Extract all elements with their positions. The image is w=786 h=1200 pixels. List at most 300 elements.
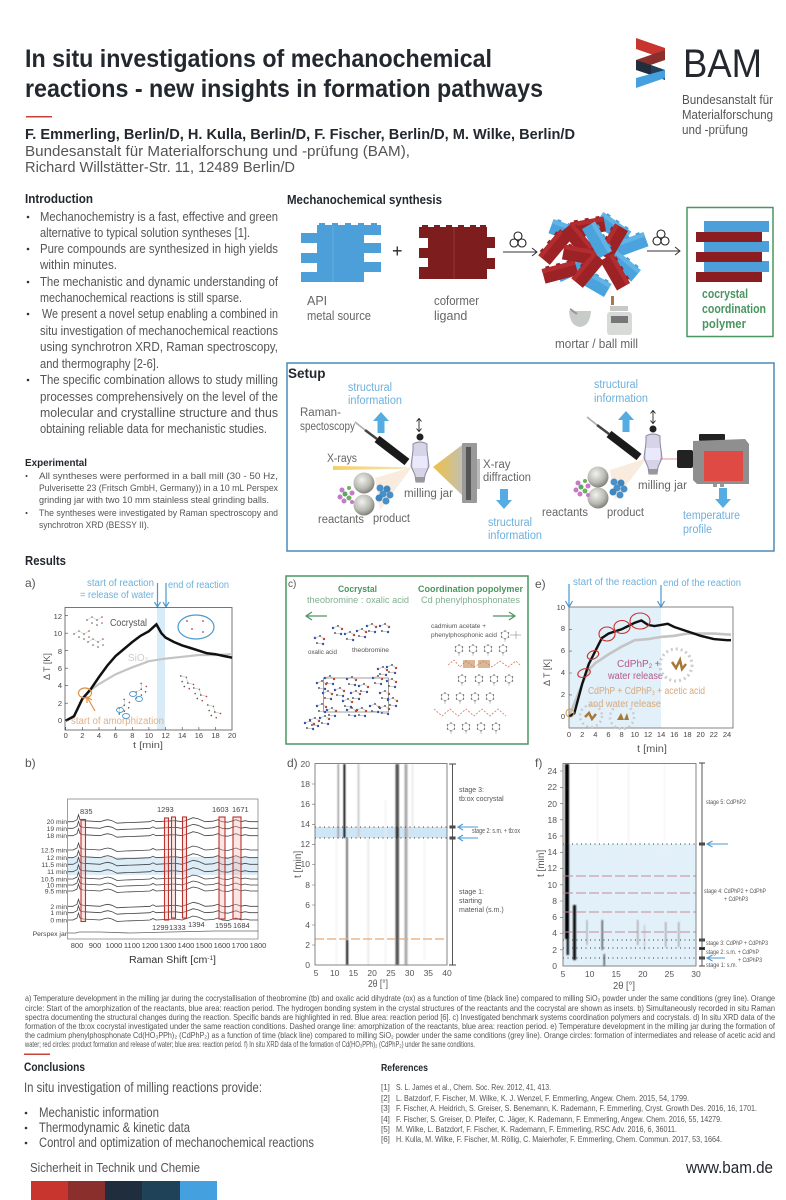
- stage labels: + CdPhP3: [738, 957, 762, 964]
- reference list: [5]: [381, 1125, 390, 1134]
- x axis: [567, 730, 731, 739]
- right setup: arrow down: [715, 488, 731, 508]
- panel letter c: c): [288, 579, 296, 590]
- conclusions bullets: Control and optimization of mechanochemical reactions: [39, 1135, 314, 1150]
- reaction arrows: [566, 584, 664, 607]
- x axis: 14: [178, 731, 186, 740]
- right setup: product: [610, 478, 628, 498]
- figure caption: water; red circles: product formation and release of water; blue area: reaction period. f) In situ XRD data of the formation of Cd(HO₃PPh)₂ (CdPhP₂) under the same conditions.: [24, 1039, 475, 1049]
- x axis: 12: [644, 730, 652, 739]
- time labels: [33, 819, 68, 938]
- orange marker: [566, 709, 574, 717]
- blue ellipse inset: [178, 615, 214, 639]
- y axis: [557, 603, 572, 721]
- reaction annotations: start of reaction: [87, 578, 154, 589]
- right setup: temperature profile: [683, 510, 740, 536]
- reference list: [3]: [381, 1104, 390, 1113]
- x axis: 6: [606, 730, 611, 739]
- introduction bullets: obtaining reliable data for mechanistic studies.: [40, 421, 267, 436]
- x axis: 8: [130, 731, 134, 740]
- plot frame: [65, 608, 232, 730]
- product box: [687, 208, 773, 336]
- reaction labels: start of the reaction: [573, 577, 657, 588]
- footer url: www.bam.de: [685, 1158, 773, 1177]
- milling symbol 2: [653, 230, 669, 245]
- x axis label: 2θ [°]: [368, 979, 388, 990]
- x axis: 10: [330, 968, 340, 978]
- band labels: 1293: [157, 805, 174, 814]
- time labels: 2 min: [50, 904, 67, 911]
- panel e: temperature chart: [535, 577, 741, 755]
- introduction bullets: The mechanistic and dynamic understanding of: [40, 274, 278, 289]
- accent line: header: [26, 116, 52, 118]
- left setup: label milling jar: milling jar: [404, 488, 453, 500]
- brick pile: [537, 211, 649, 297]
- y axis: 4: [552, 928, 557, 938]
- conclusions bullets: Thermodynamic & kinetic data: [39, 1120, 190, 1135]
- x axis: [71, 941, 266, 950]
- x axis: 1300: [160, 941, 176, 950]
- right setup: probe: [587, 417, 639, 457]
- y axis: 6: [305, 900, 310, 910]
- stage labels: tb:ox cocrystal: [459, 796, 504, 803]
- plot frame: [563, 764, 696, 966]
- left setup: structural information top: structural: [348, 382, 392, 394]
- logo institution: Bundesanstalt für: [682, 92, 774, 107]
- x axis label: 2θ [°]: [613, 981, 635, 992]
- x axis: 20: [367, 968, 377, 978]
- left setup: labels reactants product: product: [373, 513, 411, 525]
- phase transition dashes: [563, 876, 696, 932]
- logo wordmark: BAM: [683, 42, 762, 86]
- orange marker: [78, 688, 95, 711]
- panel a: temperature chart: [25, 576, 236, 750]
- stage bar: [449, 764, 456, 965]
- left setup: raman label: [300, 407, 355, 433]
- x axis label: -1: [207, 956, 214, 962]
- panel letter b: b): [25, 756, 36, 770]
- mortar icon: [569, 309, 591, 327]
- band labels: [80, 805, 250, 932]
- orange annotation: 3: [652, 691, 655, 697]
- right setup: structural information: information: [594, 393, 648, 405]
- left setup: x-ray diffraction label: diffraction: [483, 472, 531, 484]
- left setup: milling jar: [411, 434, 429, 482]
- x axis: 1400: [178, 941, 194, 950]
- heading: conclusions: Conclusions: [24, 1060, 85, 1074]
- highlighted bands: [81, 817, 241, 922]
- label: mortar / ball mill: mortar / ball mill: [555, 337, 638, 351]
- y axis: 8: [561, 624, 565, 633]
- curve labels: SiO: [128, 653, 145, 664]
- x axis: 1700: [232, 941, 248, 950]
- y axis: 10: [557, 603, 565, 612]
- heading: mechanochemical synthesis: Mechanochemical synthesis: [287, 192, 442, 207]
- stage labels: stage 3:: [459, 787, 484, 794]
- introduction bullets: The specific combination allows to study milling: [40, 372, 278, 387]
- stage bar: [699, 763, 705, 966]
- time labels: Perspex jar: [33, 931, 68, 938]
- coordination polymer heading: Coordination popolymer: [418, 584, 523, 595]
- cocrystal heading: theobromine : oxalic acid: [307, 595, 409, 606]
- reagents labels: cadmium acetate +: [431, 623, 486, 630]
- polymer structure bottom: [434, 692, 506, 734]
- reference list: [4]: [381, 1115, 390, 1124]
- x axis: 20: [228, 731, 236, 740]
- label: API metal source: API: [307, 294, 327, 308]
- reaction labels: [573, 577, 741, 589]
- y axis: 18: [548, 815, 557, 825]
- cocrystal heading: [307, 584, 409, 606]
- y axis label: Δ T [K]: [542, 659, 552, 686]
- ball mill icon: [607, 296, 632, 335]
- introduction bullets: and thermography [2-6].: [40, 356, 159, 371]
- product labels: cocrystal: [702, 287, 748, 301]
- y axis: 0: [305, 960, 310, 970]
- x axis: 10: [585, 969, 595, 979]
- introduction bullets: processes comprehensively on the level of the: [40, 389, 278, 404]
- introduction bullets: situ investigation of mechanochemical reactions: [40, 323, 278, 338]
- experimental bullets: synchrotron XRD (BESSY II).: [39, 520, 149, 531]
- right setup: labels: [542, 480, 687, 519]
- y axis: [54, 612, 68, 725]
- curve labels: [110, 618, 149, 664]
- band labels: 1684: [233, 921, 250, 930]
- conclusions bullets: Mechanistic information: [39, 1105, 159, 1120]
- product labels: coordination: [702, 302, 766, 316]
- reaction labels: end of the reaction: [663, 578, 741, 589]
- reaction area: [569, 607, 661, 728]
- reagents labels: [431, 623, 497, 639]
- cocrystal curve: [66, 624, 232, 721]
- logo institution: und -prüfung: [682, 122, 748, 137]
- label: API metal source: [307, 294, 371, 323]
- orange annotation: [588, 686, 705, 710]
- band labels: 1603: [212, 805, 229, 814]
- plot frame: [68, 799, 258, 939]
- reference list: [381, 1083, 757, 1144]
- panel: references: [381, 1062, 757, 1144]
- left setup: labels reactants product: reactants: [318, 514, 364, 526]
- x axis: 16: [670, 730, 678, 739]
- amorphization line: [315, 938, 447, 940]
- reference list: S. L. James et al., Chem. Soc. Rev. 2012, 41, 413.: [396, 1083, 551, 1092]
- y axis: 10: [301, 859, 310, 869]
- x axis label: Raman Shift [cm: [129, 955, 203, 966]
- x axis: 5: [561, 969, 566, 979]
- band labels: 1671: [232, 805, 249, 814]
- dotted limits: [315, 827, 447, 838]
- introduction bullets: [27, 209, 278, 436]
- reaction annotations: end of reaction: [168, 580, 229, 591]
- reaction annotations: = release of water: [80, 590, 155, 601]
- y axis: 2: [305, 940, 310, 950]
- x axis: [314, 968, 452, 978]
- label: coformer ligand: coformer: [434, 294, 479, 308]
- left setup: labels reactants product: [318, 513, 411, 526]
- stage labels: + CdPhP3: [724, 896, 748, 903]
- left setup: arrow up: [373, 412, 389, 433]
- y axis: 4: [58, 681, 62, 690]
- reagents labels: phenylphosphonic acid: [431, 632, 497, 639]
- left setup: x-ray diffraction label: X-ray: [483, 459, 511, 471]
- right setup: labels: milling jar: [638, 480, 687, 492]
- x axis: 4: [593, 730, 597, 739]
- time labels: 10 min: [47, 882, 67, 890]
- stage labels: stage 3: CdPhP + CdPhP3: [706, 940, 768, 947]
- y axis: 14: [548, 847, 557, 857]
- left setup: reactants: [338, 486, 354, 504]
- y axis: 14: [301, 819, 310, 829]
- right setup: arrow up: [618, 411, 634, 432]
- time labels: 12 min: [47, 855, 67, 862]
- y axis: 6: [552, 912, 557, 922]
- curve labels: 2: [145, 658, 149, 664]
- accent line: conclusions: [24, 1054, 50, 1055]
- molecule insets: [73, 616, 222, 720]
- curve labels: Cocrystal: [110, 618, 147, 629]
- y axis: 18: [301, 779, 310, 789]
- product labels: polymer: [702, 317, 746, 331]
- y axis: 4: [561, 668, 565, 677]
- x axis: 2: [80, 731, 84, 740]
- left setup: double arrow: [416, 418, 422, 432]
- experimental bullets: [26, 471, 278, 531]
- y axis label: Δ T [K]: [42, 653, 52, 680]
- stage arrows: [707, 841, 728, 961]
- y axis: 8: [58, 647, 62, 656]
- affiliation: Bundesanstalt für Materialforschung und -prüfung (BAM),: [25, 143, 410, 160]
- x axis: 25: [665, 969, 674, 979]
- stage labels: [459, 787, 520, 914]
- stage labels: stage 4: CdPhP2 + CdPhP: [704, 888, 766, 895]
- band labels: 1299: [152, 923, 169, 932]
- left setup: glow: [375, 467, 412, 510]
- x axis: 4: [97, 731, 101, 740]
- panel b: raman spectra: [25, 756, 266, 966]
- introduction bullets: We present a novel setup enabling a combined in: [42, 306, 278, 321]
- BAM logo: [636, 38, 774, 137]
- time labels: 20 min: [47, 819, 67, 826]
- stage labels: stage 2: s.m. + tb:ox: [472, 828, 520, 835]
- y axis: 8: [305, 880, 310, 890]
- introduction bullets: using synchrotron XRD, Raman spectroscopy,: [40, 339, 278, 354]
- reaction band: [68, 857, 258, 875]
- left setup: structural information bottom: [488, 517, 542, 542]
- reference list: H. Kulla, M. Wilke, F. Fischer, M. Röllig, C. Maierhofer, F. Emmerling, Chem. Commun. 2017, 53, 1664.: [396, 1135, 722, 1144]
- x axis: 0: [567, 730, 571, 739]
- time labels: 10.5 min: [41, 876, 67, 884]
- y axis: 12: [54, 612, 62, 621]
- y axis: 0: [552, 961, 557, 971]
- panel letter d: d): [287, 756, 298, 770]
- reaction period band: [157, 608, 165, 730]
- plot frame: [315, 764, 447, 965]
- panel: introduction: [25, 191, 278, 436]
- molecule labels: oxalic acid: [308, 649, 337, 656]
- orange annotation: + acetic acid: [655, 686, 705, 697]
- reaction annotations: [80, 578, 229, 601]
- y axis label: t [min]: [536, 850, 547, 877]
- x axis: 22: [710, 730, 718, 739]
- title: reactions - new insights in formation pathways: [25, 75, 543, 103]
- introduction bullets: molecular and crystalline structure and thus: [40, 405, 278, 420]
- reaction area: [563, 844, 696, 966]
- y axis: 2: [58, 699, 62, 708]
- experimental bullets: The syntheses were investigated by Raman spectroscopy and: [39, 508, 278, 519]
- label: coformer ligand: [434, 294, 479, 323]
- panel: conclusions: [24, 1060, 314, 1150]
- stage labels: material (s.m.): [459, 907, 504, 914]
- left setup: x-rays label: X-rays: [327, 453, 357, 465]
- x axis: 10: [631, 730, 639, 739]
- heading: references: References: [381, 1062, 428, 1074]
- y axis: 16: [548, 831, 557, 841]
- x axis: 40: [442, 968, 452, 978]
- panel letter f: f): [535, 756, 542, 770]
- coordination polymer heading: [418, 584, 523, 606]
- x axis: 16: [195, 731, 203, 740]
- x axis: 25: [386, 968, 396, 978]
- y axis: 4: [305, 920, 310, 930]
- reaction arrows: [154, 583, 169, 607]
- plot frame: [569, 607, 733, 728]
- band labels: 1394: [188, 920, 205, 929]
- right setup: structural information: [594, 379, 648, 405]
- structure insets: [580, 649, 692, 729]
- spectra traces: [68, 815, 258, 933]
- y axis: 22: [548, 782, 557, 792]
- time labels: 9.5 min: [45, 888, 67, 896]
- x axis label: ]: [213, 955, 216, 966]
- reference list: F. Fischer, S. Greiser, D. Pfeifer, C. Jäger, K. Rademann, F. Emmerling, Angew. Chem. 2016, 55, 14279.: [396, 1115, 722, 1124]
- title: In situ investigations of mechanochemical: [25, 45, 492, 73]
- x axis: 30: [691, 969, 701, 979]
- panel: setup: [287, 363, 774, 551]
- introduction bullets: Mechanochemistry is a fast, effective and green: [40, 209, 278, 224]
- panel: experimental: [25, 457, 278, 531]
- layered brick product: [696, 221, 769, 282]
- introduction bullets: mechanochemical reactions is still sparse.: [40, 290, 242, 305]
- stage labels: starting: [459, 898, 482, 905]
- time labels: 11 min: [47, 869, 67, 876]
- x axis: 800: [71, 941, 83, 950]
- red bricks: [419, 225, 495, 279]
- left setup: raman probe: [355, 422, 407, 462]
- y axis: 0: [561, 712, 565, 721]
- blue bricks: [301, 223, 381, 282]
- left setup: structural information bottom: information: [488, 530, 542, 542]
- x axis: 10: [145, 731, 153, 740]
- y axis: 16: [301, 799, 310, 809]
- molecule labels: theobromine: [352, 647, 389, 654]
- x axis: 20: [638, 969, 648, 979]
- time labels: 1 min: [50, 910, 67, 917]
- logo institution: [682, 92, 774, 137]
- left setup: structural information bottom: structural: [488, 517, 532, 529]
- diffraction lines: [336, 764, 425, 965]
- y axis: 6: [58, 664, 62, 673]
- right setup: labels: reactants: [542, 507, 588, 519]
- x axis: 24: [723, 730, 731, 739]
- product curve: [569, 620, 731, 717]
- x axis: 5: [314, 968, 319, 978]
- reference list: L. Batzdorf, F. Fischer, M. Wilke, K. J. Wenzel, F. Emmerling, Angew. Chem. 2015, 54, 1799.: [396, 1094, 689, 1103]
- cocrystal heading: Cocrystal: [338, 584, 377, 595]
- time labels: 12.5 min: [41, 848, 67, 854]
- y axis: 6: [561, 646, 565, 655]
- affiliation: Richard Willstätter-Str. 11, 12489 Berlin/D: [25, 159, 295, 176]
- x axis: 1500: [196, 941, 212, 950]
- stage labels: [704, 799, 768, 969]
- x axis: 0: [64, 731, 68, 740]
- arrow right: [493, 612, 515, 620]
- molecule labels: [308, 647, 389, 656]
- x axis: 1000: [106, 941, 122, 950]
- right setup: thermal camera: [660, 434, 749, 487]
- x axis: 2: [580, 730, 584, 739]
- authors: F. Emmerling, Berlin/D, H. Kulla, Berlin/D, F. Fischer, Berlin/D, M. Wilke, Berlin/D: [25, 126, 575, 143]
- left setup: grinding balls: [354, 472, 374, 516]
- heading: introduction: Introduction: [25, 191, 93, 206]
- stage labels: stage 1: s.m.: [706, 962, 737, 969]
- red annotation: +: [652, 659, 661, 670]
- stage labels: stage 5: CdPhP2: [706, 799, 746, 806]
- experimental bullets: grinding jar with two 10 mm stainless steal grinding balls.: [39, 495, 269, 506]
- x axis: 1200: [142, 941, 158, 950]
- red annotation: water release: [607, 671, 663, 682]
- experimental bullets: Pulverisette 23 (Fritsch GmbH, Germany)) in a 10 mL Perspex: [39, 483, 278, 494]
- coordination polymer heading: Cd phenylphosphonates: [421, 595, 520, 606]
- y axis label: t [min]: [293, 851, 304, 878]
- heading: setup: Setup: [288, 366, 326, 381]
- y axis: 2: [561, 690, 565, 699]
- x axis: 30: [405, 968, 415, 978]
- band labels: 835: [80, 807, 93, 816]
- dotted limits: [563, 844, 696, 958]
- left setup: raman label: Raman-: [300, 407, 341, 419]
- label: API metal source: metal source: [307, 309, 371, 323]
- reference list: [1]: [381, 1083, 390, 1092]
- logo institution: Materialforschung: [682, 107, 773, 122]
- polymer structure top: [448, 644, 520, 686]
- x axis: 15: [349, 968, 358, 978]
- right setup: structural information: structural: [594, 379, 638, 391]
- x axis: 1100: [124, 941, 140, 950]
- y axis: 2: [552, 945, 557, 955]
- label: coformer ligand: ligand: [434, 309, 467, 323]
- left setup: arrow down: [496, 489, 512, 509]
- panel: mechanochemical synthesis: [287, 192, 773, 351]
- footer colour bar: [31, 1181, 217, 1200]
- stage arrows: [458, 824, 478, 841]
- x axis: 12: [161, 731, 170, 740]
- plus sign: +: [392, 241, 403, 261]
- right setup: labels: product: [607, 507, 645, 519]
- band labels: 1595: [215, 921, 232, 930]
- y axis: 10: [54, 629, 62, 638]
- red annotation: 2: [649, 664, 653, 670]
- x axis: 20: [696, 730, 705, 739]
- stage labels: stage 2: s.m. + CdPhP: [706, 949, 759, 956]
- right setup: glow: [610, 458, 647, 500]
- silica curve: [66, 654, 232, 721]
- reference list: M. Wilke, L. Batzdorf, F. Fischer, K. Rademann, F. Emmerling, RSC Adv. 2016, 6, 36011.: [396, 1125, 677, 1134]
- x axis: 18: [211, 731, 220, 740]
- left setup: detector: [462, 443, 480, 503]
- x axis label: t [min]: [133, 740, 163, 750]
- y axis: [548, 766, 563, 971]
